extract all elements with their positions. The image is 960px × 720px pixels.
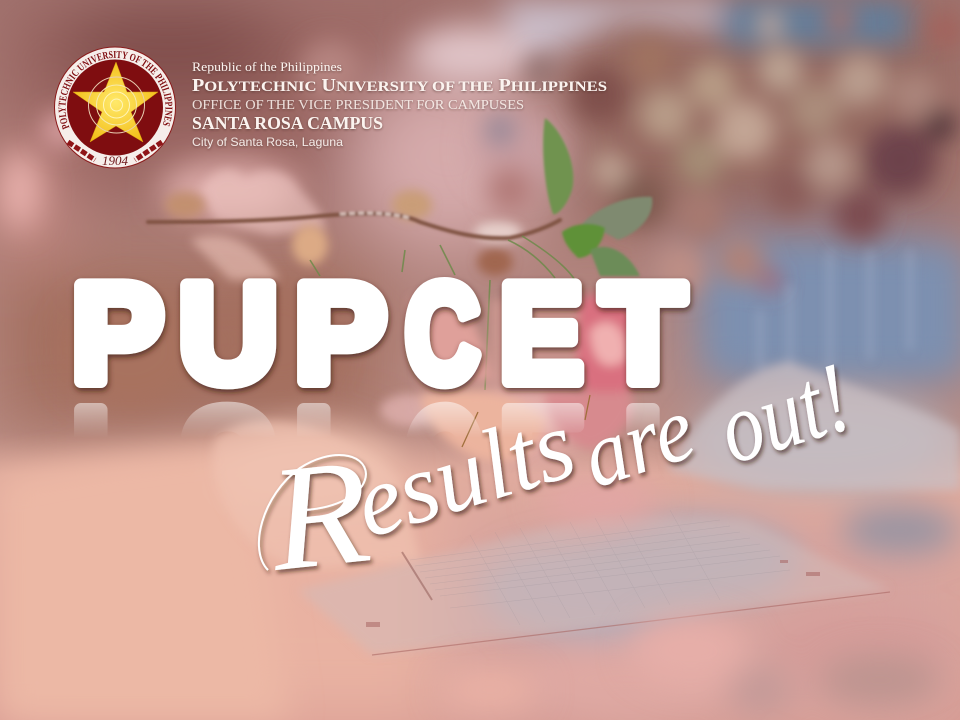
city line: City of Santa Rosa, Laguna: [192, 135, 343, 149]
blossom branch with leaves and flowers: [148, 118, 652, 462]
subtitle: Results are out!: are: [570, 376, 706, 507]
PUPCET reflection: C: [405, 380, 479, 536]
title: PUPCET: U: [179, 256, 278, 411]
title: PUPCET: P: [295, 256, 386, 411]
upper leaf: [543, 118, 573, 214]
PUPCET reflection: T: [601, 380, 685, 535]
subtitle: Results are out!: out!: [706, 341, 863, 485]
flowers behind title: [410, 294, 650, 462]
title: PUPCET: E: [500, 255, 583, 410]
title: PUPCET: T: [601, 256, 685, 411]
stems: [310, 236, 575, 390]
university name: POLYTECHNIC UNIVERSITY OF THE PHILIPPINES: [192, 75, 607, 95]
republic line: Republic of the Philippines: [192, 60, 342, 74]
title: PUPCET: C: [405, 255, 479, 411]
background: pink foreground blossoms: [440, 478, 940, 714]
title: PUPCET: [72, 255, 685, 411]
flower cluster at branch junction: [165, 190, 522, 276]
branch: [148, 213, 560, 238]
seal ring text: POLYTECHNIC UNIVERSITY OF THE PHILIPPINES: [58, 51, 172, 130]
background: sheet edge: [372, 592, 890, 655]
answer sheet grid: [410, 510, 790, 625]
subtitle: Results are out!: R: [261, 427, 377, 603]
answer sheet marks: [366, 552, 820, 627]
subtitle flourish on R: [259, 455, 366, 570]
office line: OFFICE OF THE VICE PRESIDENT FOR CAMPUSES: [192, 98, 524, 113]
campus line: SANTA ROSA CAMPUS: [192, 113, 383, 133]
subtitle: Results are out!: [259, 341, 863, 603]
seal laurels: [68, 142, 162, 160]
right leaves: [562, 197, 652, 276]
PUPCET reflection: P: [295, 380, 386, 535]
icon: yellow star: [73, 62, 158, 142]
header text block: [192, 60, 607, 149]
PUPCET reflection: [74, 402, 660, 435]
background: blurred blossom clusters: [42, 6, 960, 296]
PUPCET reflection: E: [500, 381, 583, 536]
background: shirt stripes and fine blur: [213, 250, 960, 655]
seal year: 1904: [102, 153, 128, 168]
PUP seal logo: [54, 46, 176, 168]
subtitle: Results are out!: esults: [342, 388, 587, 559]
PUPCET reflection: P: [72, 380, 163, 535]
large pale blossom: [190, 169, 325, 280]
title: PUPCET: P: [72, 256, 163, 411]
PUPCET reflection: U: [179, 380, 278, 535]
